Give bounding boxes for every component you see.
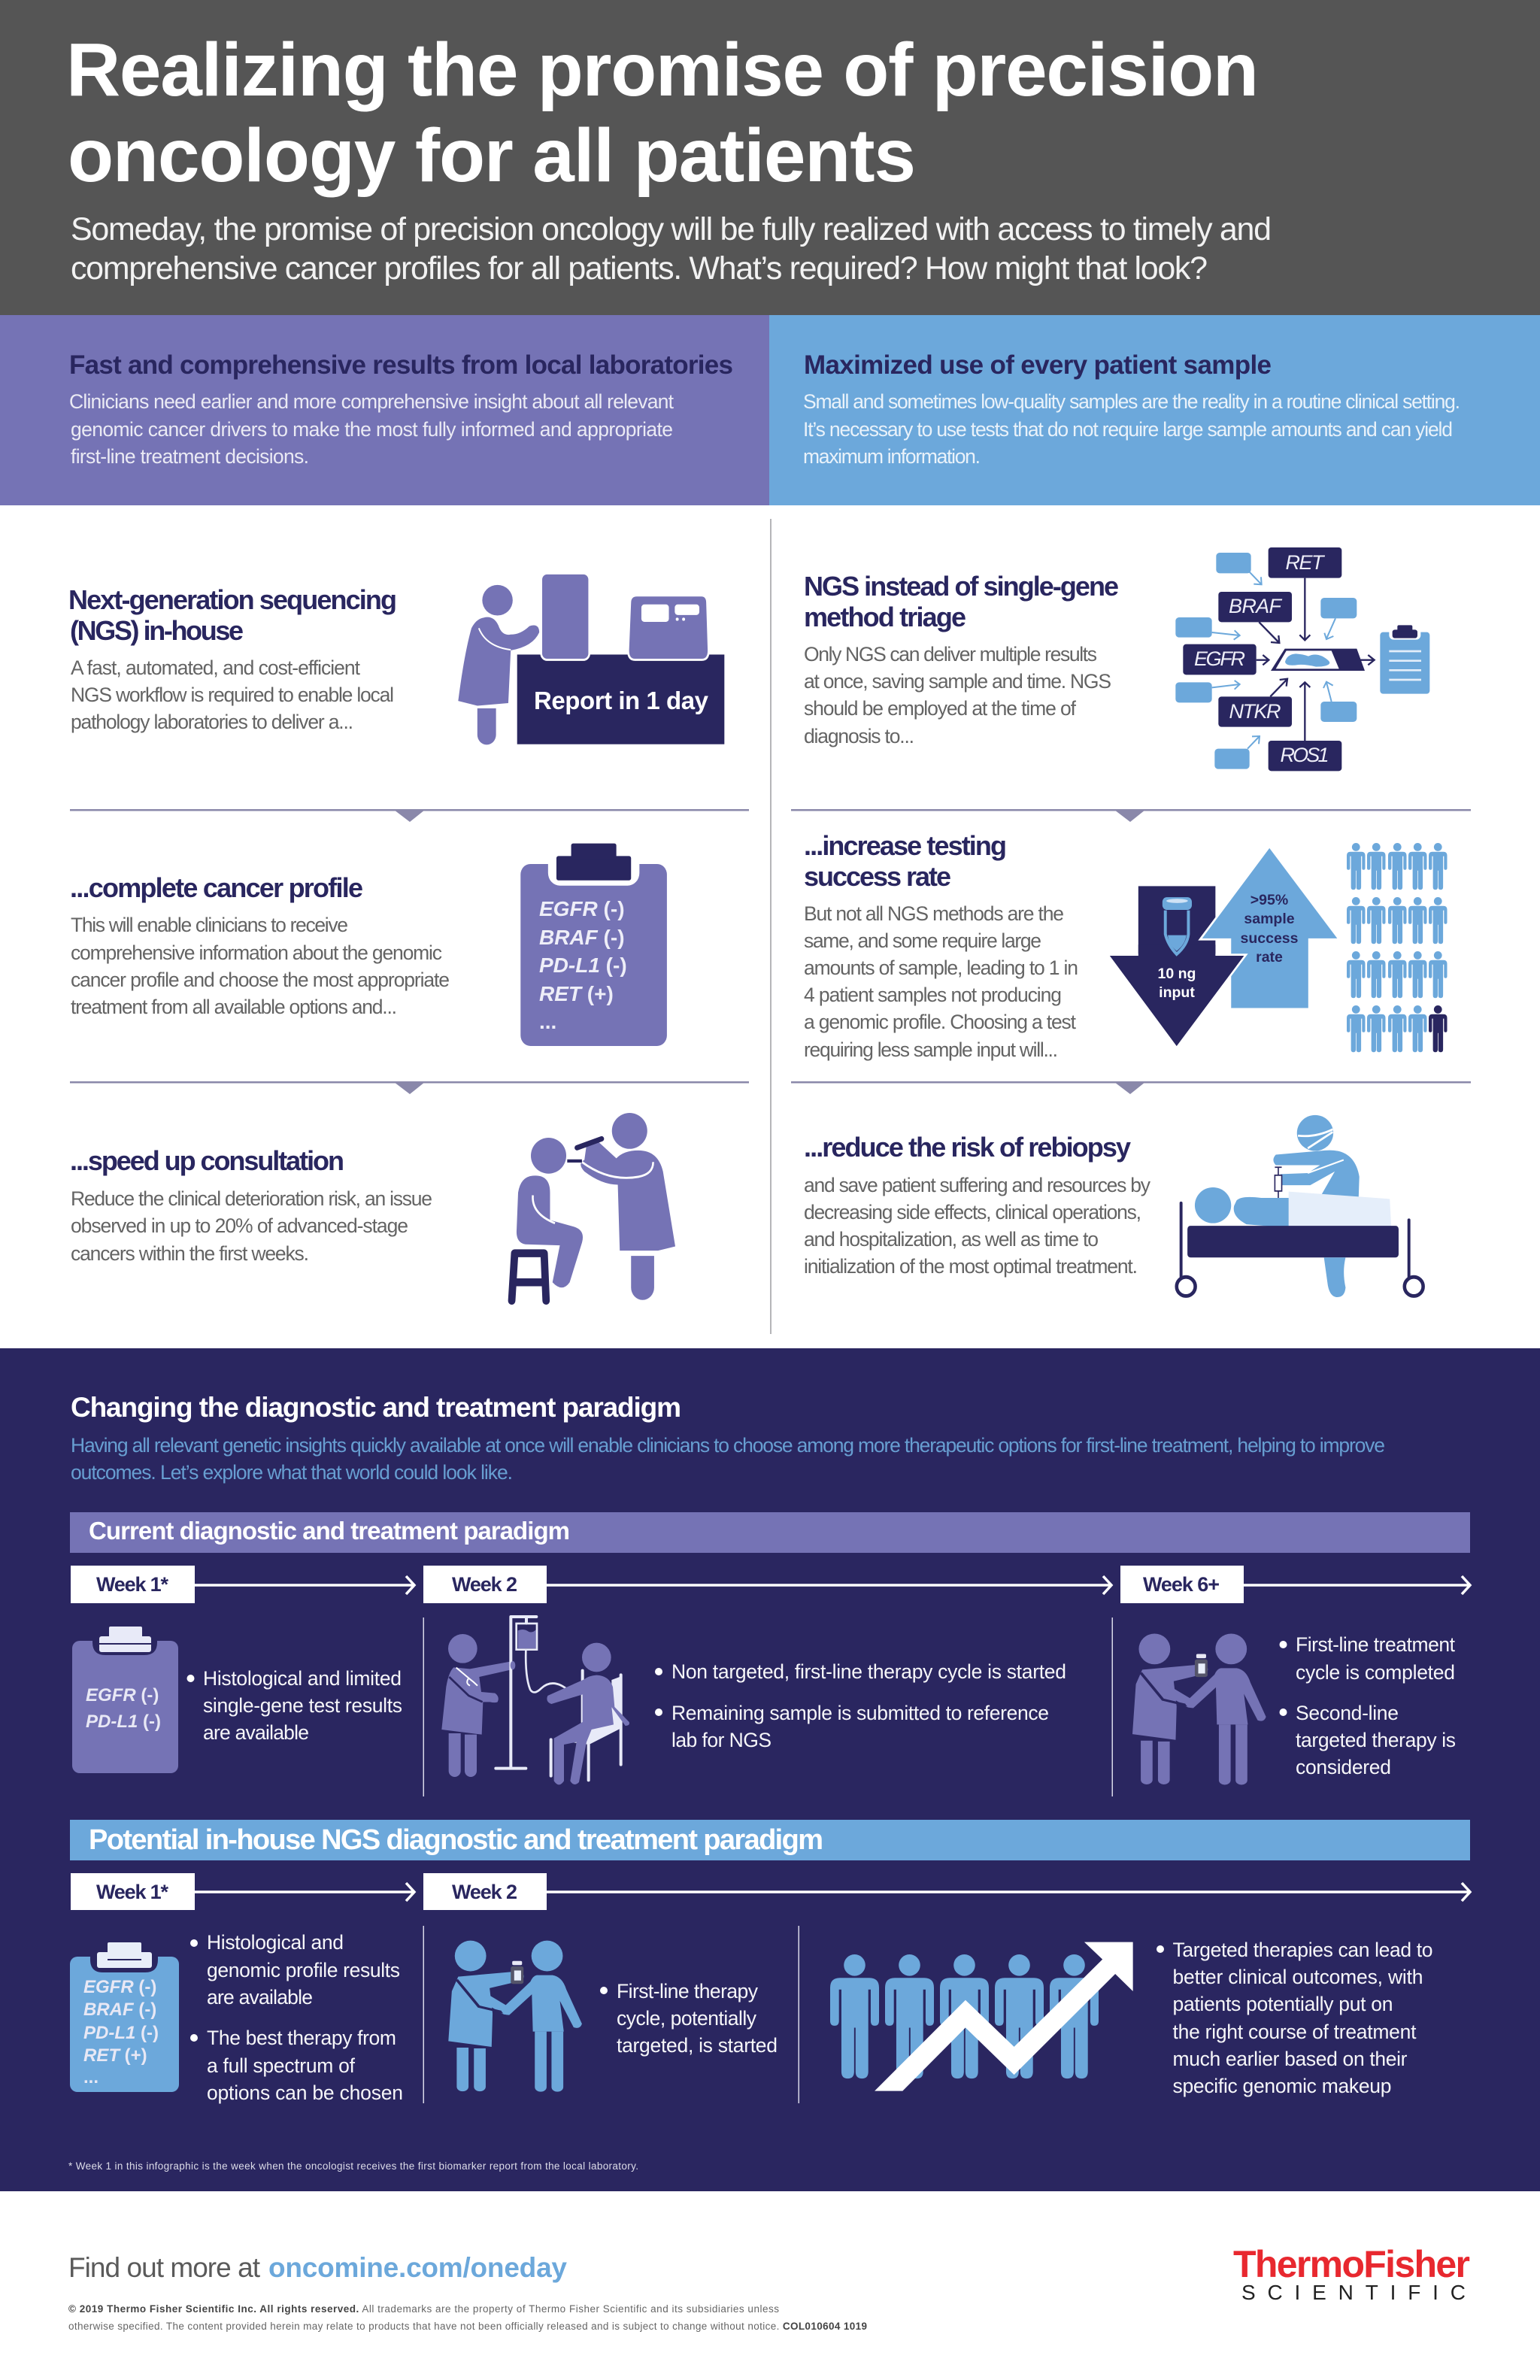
diagram: gene inputs to slide and report: NTKR bbox=[1229, 700, 1281, 723]
body text: treatment from all available options and... bbox=[71, 996, 397, 1018]
arrow: right divider 1 bbox=[1114, 810, 1145, 822]
panel text: It’s necessary to use tests that do not require large sample amounts and can yield bbox=[803, 418, 1453, 441]
heading: NGS instead of single-gene bbox=[804, 571, 1119, 602]
footer legal text bbox=[68, 2303, 867, 2332]
text: outcomes: much earlier based on their bbox=[1173, 2048, 1408, 2070]
chart: input down and success rate up arrows bbox=[1110, 848, 1337, 1046]
title: oncology for all patients bbox=[68, 114, 916, 198]
chart: input down and success rate up arrows: >95% bbox=[1250, 892, 1288, 908]
section intro bbox=[71, 1434, 1385, 1484]
heading bbox=[804, 571, 1119, 632]
title: Realizing the promise of precision bbox=[66, 28, 1259, 112]
text: outcomes: the right course of treatment bbox=[1173, 2021, 1417, 2043]
heading: ...increase testing bbox=[804, 830, 1007, 861]
footer legal text: otherwise specified. The content provided herein may relate to products that have not been officially released and is subject to change without notice. COL010604 1019 bbox=[68, 2321, 867, 2332]
text: week 2 current: Non targeted, first-line therapy cycle is started bbox=[671, 1660, 1066, 1683]
body text: This will enable clinicians to receive bbox=[71, 914, 348, 936]
chart: input down and success rate up arrows: sample bbox=[1244, 911, 1295, 927]
chart: input down and success rate up arrows: input bbox=[1159, 984, 1195, 1001]
panel text bbox=[803, 390, 1460, 468]
heading bbox=[804, 830, 1007, 892]
text: week 2 current: Remaining sample is submitted to reference bbox=[671, 1702, 1049, 1724]
block: NGS instead of single-gene method triage bbox=[804, 547, 1429, 771]
text: week 2 potential: cycle, potentially bbox=[617, 2007, 757, 2030]
text: week 6+ current: Second-line bbox=[1296, 1702, 1399, 1724]
text: week 1 potential: Histological and bbox=[207, 1931, 344, 1954]
heading: ...reduce the risk of rebiopsy bbox=[804, 1132, 1131, 1163]
body text: A fast, automated, and cost-efficient bbox=[71, 656, 361, 679]
body text: decreasing side effects, clinical operations, bbox=[804, 1201, 1141, 1223]
body text: Reduce the clinical deterioration risk, an issue bbox=[71, 1187, 432, 1210]
timeline: current paradigm: Week 6+ bbox=[1143, 1573, 1220, 1596]
panel text: first-line treatment decisions. bbox=[71, 445, 309, 468]
panel text: Small and sometimes low-quality samples are the reality in a routine clinical setting. bbox=[803, 390, 1460, 413]
body text: and hospitalization, as well as time to bbox=[804, 1228, 1099, 1251]
icon: clipboard with limited results: PD-L1 (-) bbox=[86, 1711, 161, 1732]
diagram: gene inputs to slide and report: ROS1 bbox=[1280, 744, 1329, 766]
footer legal text: © 2019 Thermo Fisher Scientific Inc. All rights reserved. All trademarks are the property of Thermo Fisher Scientific and its subsidiaries unless bbox=[68, 2303, 779, 2315]
icon: doctor and patient with medication, week 2 bbox=[448, 1941, 582, 2092]
section intro: outcomes. Let’s explore what that world could look like. bbox=[71, 1461, 513, 1484]
text: outcomes: Targeted therapies can lead to bbox=[1173, 1939, 1433, 1961]
timeline: current paradigm bbox=[71, 1566, 1470, 1603]
heading: ...speed up consultation bbox=[70, 1145, 344, 1176]
logo: Thermo Fisher Scientific: ThermoFisher bbox=[1233, 2243, 1470, 2285]
block: speed up consultation bbox=[70, 1113, 675, 1301]
timeline: current paradigm: Week 2 bbox=[452, 1573, 517, 1596]
panel heading: Maximized use of every patient sample bbox=[804, 350, 1272, 380]
heading: method triage bbox=[804, 602, 966, 632]
body text: diagnosis to... bbox=[804, 725, 914, 747]
heading: ...complete cancer profile bbox=[70, 872, 363, 903]
current paradigm band: Current diagnostic and treatment paradigm bbox=[89, 1517, 570, 1545]
icon: clipboard with full profile: ... bbox=[83, 2067, 99, 2087]
body text bbox=[71, 1187, 432, 1265]
text: week 1 current: single-gene test results bbox=[203, 1694, 402, 1717]
text: week 2 potential: targeted, is started bbox=[617, 2034, 778, 2057]
diagram: gene inputs to slide and report bbox=[1175, 547, 1429, 771]
timeline: potential paradigm bbox=[71, 1873, 1470, 1910]
icon: nurse and patient with IV drip bbox=[441, 1617, 629, 1784]
body text: requiring less sample input will... bbox=[804, 1038, 1058, 1061]
diagram: gene inputs to slide and report: EGFR bbox=[1194, 647, 1245, 670]
timeline: potential paradigm: Week 1* bbox=[96, 1881, 168, 1903]
text: week 1 potential bbox=[190, 1931, 403, 2104]
text: week 2 current: lab for NGS bbox=[671, 1729, 772, 1751]
footnote: * Week 1 in this infographic is the week when the oncologist receives the first biomarker report from the local laboratory. bbox=[68, 2160, 638, 2172]
body text bbox=[804, 643, 1111, 747]
icon: clipboard with full profile: PD-L1 (-) bbox=[83, 2023, 159, 2043]
title bbox=[66, 28, 1259, 198]
panel: changing the diagnostic and treatment paradigm bbox=[0, 1348, 1540, 2191]
icon: clinician examining seated patient bbox=[512, 1113, 675, 1301]
text: outcomes bbox=[1157, 1939, 1433, 2097]
body text: should be employed at the time of bbox=[804, 697, 1077, 720]
icon: clipboard with biomarker results: RET (+) bbox=[539, 982, 614, 1005]
heading: (NGS) in-house bbox=[70, 615, 244, 646]
body text: NGS workflow is required to enable local bbox=[71, 684, 394, 706]
icon: patient on bed with clinician bbox=[1177, 1115, 1423, 1297]
text: week 1 current: Histological and limited bbox=[203, 1667, 402, 1690]
text: week 1 current: are available bbox=[203, 1721, 309, 1744]
icon: clipboard with limited results bbox=[72, 1627, 178, 1773]
footer call to action bbox=[68, 2252, 567, 2283]
icon: clipboard with full profile bbox=[70, 1942, 179, 2092]
text: outcomes: better clinical outcomes, with bbox=[1173, 1966, 1423, 1988]
block: next-generation sequencing bbox=[68, 573, 724, 744]
icon: clipboard with limited results: EGFR (-) bbox=[86, 1685, 159, 1705]
icon: clipboard with biomarker results: EGFR (-) bbox=[539, 897, 625, 920]
icon: patients with rising arrow bbox=[830, 1942, 1133, 2091]
body text: But not all NGS methods are the bbox=[804, 902, 1064, 925]
body text bbox=[71, 656, 394, 733]
icon: lab technician with sequencers bbox=[458, 573, 724, 744]
text: week 1 potential: are available bbox=[207, 1986, 313, 2009]
potential paradigm band bbox=[70, 1820, 1470, 1860]
icon: clipboard with full profile: RET (+) bbox=[83, 2045, 147, 2066]
timeline: current paradigm: Week 1* bbox=[96, 1573, 168, 1596]
arrow: left divider 1 bbox=[394, 810, 425, 822]
text: outcomes: specific genomic makeup bbox=[1173, 2075, 1391, 2097]
body text bbox=[804, 1174, 1151, 1278]
text: week 6+ current bbox=[1280, 1633, 1456, 1778]
panel heading: Fast and comprehensive results from local laboratories bbox=[69, 350, 733, 380]
arrow: right divider 2 bbox=[1114, 1082, 1145, 1094]
block: increase testing success rate bbox=[804, 830, 1447, 1061]
logo: Thermo Fisher Scientific bbox=[1233, 2243, 1470, 2304]
icon: clipboard with biomarker results: BRAF (-) bbox=[539, 926, 625, 949]
chart: input down and success rate up arrows: rate bbox=[1256, 949, 1283, 966]
text: week 1 potential: options can be chosen bbox=[207, 2081, 403, 2104]
footer call to action: Find out more at bbox=[68, 2252, 261, 2283]
text: week 2 potential bbox=[600, 1980, 778, 2057]
heading: Next-generation sequencing bbox=[68, 584, 397, 615]
panel: fast and comprehensive results bbox=[0, 315, 769, 505]
body text: Only NGS can deliver multiple results bbox=[804, 643, 1097, 665]
text: week 1 potential: a full spectrum of bbox=[207, 2054, 356, 2077]
body text: amounts of sample, leading to 1 in bbox=[804, 957, 1078, 979]
body text: at once, saving sample and time. NGS bbox=[804, 670, 1111, 693]
panel text: Clinicians need earlier and more comprehensive insight about all relevant bbox=[69, 390, 675, 413]
text: week 6+ current: considered bbox=[1296, 1756, 1391, 1778]
block: reduce the risk of rebiopsy bbox=[804, 1115, 1423, 1297]
body text: and save patient suffering and resources by bbox=[804, 1174, 1151, 1196]
icon: clipboard with full profile: EGFR (-) bbox=[83, 1977, 156, 1997]
icon: clipboard with full profile: BRAF (-) bbox=[83, 2000, 156, 2020]
text: week 1 potential: genomic profile results bbox=[207, 1959, 400, 1981]
diagram: gene inputs to slide and report: RET bbox=[1286, 551, 1326, 574]
chart: 20 person pictogram bbox=[1347, 843, 1447, 1052]
icon: clipboard with biomarker results bbox=[520, 844, 667, 1046]
header banner bbox=[0, 0, 1540, 315]
text: week 1 potential: The best therapy from bbox=[207, 2027, 396, 2049]
chart: input down and success rate up arrows: 10 ng bbox=[1158, 966, 1196, 982]
icon: doctor and patient with medication, week 6 bbox=[1132, 1633, 1266, 1784]
subtitle bbox=[71, 211, 1272, 287]
timeline: potential paradigm: Week 2 bbox=[452, 1881, 517, 1903]
icon: clipboard with biomarker results: PD-L1 (-) bbox=[539, 954, 627, 977]
panel text: genomic cancer drivers to make the most fully informed and appropriate bbox=[71, 418, 673, 441]
panel text bbox=[69, 390, 675, 468]
body text: comprehensive information about the genomic bbox=[71, 941, 442, 964]
block: complete cancer profile bbox=[70, 844, 667, 1046]
chart: input down and success rate up arrows: success bbox=[1241, 930, 1299, 947]
potential paradigm band: Potential in-house NGS diagnostic and treatment paradigm bbox=[89, 1824, 823, 1856]
text: week 6+ current: targeted therapy is bbox=[1296, 1729, 1456, 1751]
text: week 2 potential: First-line therapy bbox=[617, 1980, 759, 2003]
body text: pathology laboratories to deliver a... bbox=[71, 711, 353, 733]
body text bbox=[804, 902, 1078, 1061]
body text: initialization of the most optimal treatment. bbox=[804, 1255, 1138, 1278]
heading: success rate bbox=[804, 861, 951, 892]
text: week 2 current bbox=[655, 1660, 1066, 1751]
section heading: Changing the diagnostic and treatment paradigm bbox=[71, 1392, 681, 1423]
section intro: Having all relevant genetic insights quickly available at once will enable clinicians to choose among more therapeutic options for first-line treatment, helping to improve bbox=[71, 1434, 1385, 1457]
body text: same, and some require large bbox=[804, 929, 1041, 952]
logo: Thermo Fisher Scientific: SCIENTIFIC bbox=[1241, 2281, 1466, 2304]
body text: cancer profile and choose the most appropriate bbox=[71, 969, 450, 991]
text: week 1 current bbox=[186, 1667, 402, 1744]
body text: a genomic profile. Choosing a test bbox=[804, 1011, 1077, 1033]
subtitle: comprehensive cancer profiles for all patients. What’s required? How might that look? bbox=[71, 250, 1208, 287]
current paradigm band bbox=[70, 1512, 1470, 1553]
diagram: gene inputs to slide and report: BRAF bbox=[1229, 595, 1283, 617]
body text: 4 patient samples not producing bbox=[804, 984, 1062, 1006]
body text: cancers within the first weeks. bbox=[71, 1242, 309, 1265]
text: week 6+ current: First-line treatment bbox=[1296, 1633, 1456, 1656]
body text bbox=[71, 914, 450, 1018]
panel: maximized use of every patient sample bbox=[769, 315, 1540, 505]
arrow: left divider 2 bbox=[394, 1082, 425, 1094]
footer call to action: oncomine.com/oneday bbox=[268, 2252, 567, 2283]
body text: observed in up to 20% of advanced-stage bbox=[71, 1214, 408, 1237]
icon: clipboard with biomarker results: ... bbox=[539, 1010, 556, 1033]
text: week 6+ current: cycle is completed bbox=[1296, 1661, 1455, 1684]
heading bbox=[68, 584, 397, 646]
panel text: maximum information. bbox=[803, 445, 981, 468]
subtitle: Someday, the promise of precision oncology will be fully realized with access to timely and bbox=[71, 211, 1272, 247]
label: Report in 1 day bbox=[534, 687, 709, 714]
text: outcomes: patients potentially put on bbox=[1173, 1993, 1393, 2015]
